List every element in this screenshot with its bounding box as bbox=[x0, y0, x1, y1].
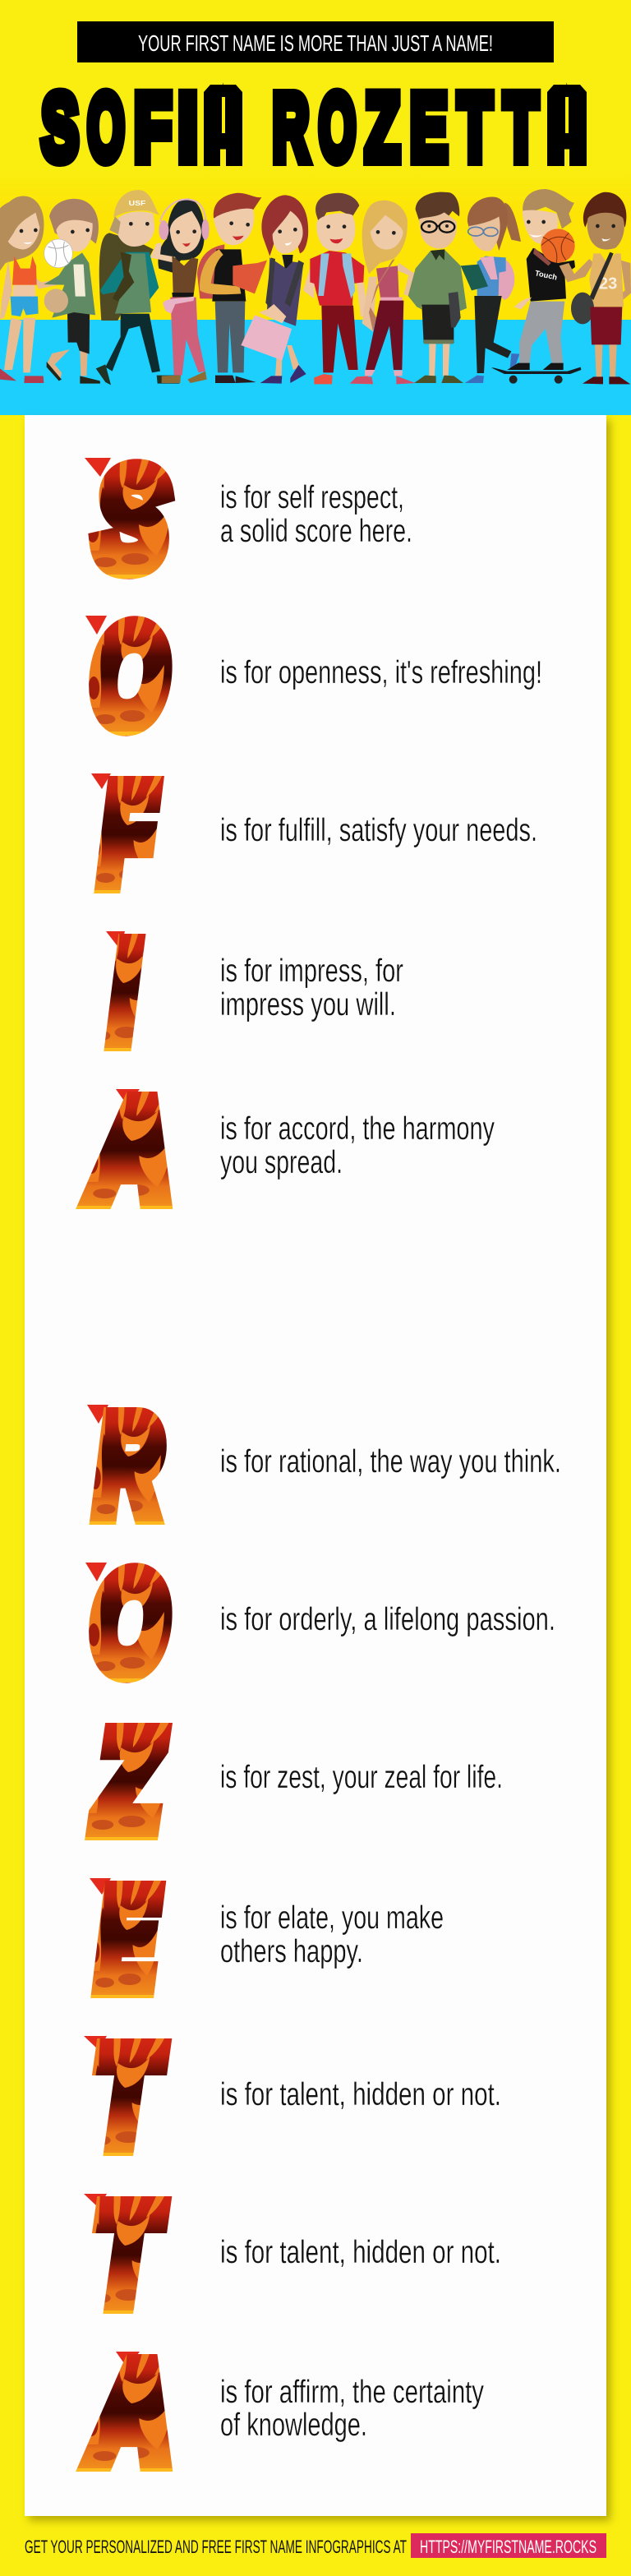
illustration: group of young people, right half bbox=[303, 189, 631, 384]
row: letter E: E bbox=[97, 1862, 159, 2018]
person 12: boy in tank top with shoulder bag bbox=[560, 192, 631, 384]
row: letter T: T bbox=[94, 2020, 163, 2176]
title: name: A bbox=[550, 75, 583, 181]
row: letter R: R bbox=[96, 1389, 160, 1544]
row: letter A bbox=[90, 1073, 495, 1229]
row: letter A: is for affirm, the certainty bbox=[220, 2375, 484, 2410]
title: name: O bbox=[88, 76, 124, 181]
title: name: S bbox=[41, 75, 79, 180]
row: letter S: is for self respect, bbox=[220, 480, 404, 515]
row: letter A: A bbox=[90, 2335, 171, 2491]
row: letter A: is for accord, the harmony bbox=[220, 1111, 495, 1147]
title: name: O bbox=[319, 76, 356, 181]
row: letter T: is for talent, hidden or not. bbox=[220, 2235, 501, 2270]
row: letter S: a solid score here. bbox=[220, 514, 412, 549]
title: name: F bbox=[134, 75, 172, 180]
row: letter E bbox=[90, 1862, 444, 2018]
row: letter T: is for talent, hidden or not. bbox=[220, 2077, 501, 2112]
footer call to action: GET YOUR PERSONALIZED AND FREE FIRST NAME INFOGRAPHICS AT bbox=[25, 2537, 407, 2557]
person 4: girl with pink headphones bbox=[150, 199, 210, 376]
person 12: boy in tank top with shoulder bag: 23 bbox=[599, 275, 617, 293]
person 11: skateboarder with basketball: Touch bbox=[534, 269, 558, 282]
illustration backdrop: yellow band bbox=[0, 169, 631, 320]
row: letter O: O bbox=[91, 1544, 167, 1701]
illustration backdrop: blue floor bbox=[0, 320, 631, 415]
person 2: volleyball player in green jacket bbox=[44, 199, 100, 384]
row: letter O bbox=[85, 1544, 555, 1701]
row: letter Z bbox=[94, 1704, 503, 1859]
row: letter T: T bbox=[94, 2177, 163, 2334]
row: letter A: you spread. bbox=[220, 1145, 343, 1180]
person 1: girl in orange top bbox=[0, 196, 64, 383]
title: name: A bbox=[207, 75, 239, 181]
title: name: R bbox=[273, 75, 309, 180]
person 8: blonde girl in pink top bbox=[350, 201, 416, 384]
row: letter R bbox=[87, 1389, 561, 1544]
person 11: skateboarder with basketball bbox=[491, 189, 581, 384]
row: letter E: is for elate, you make bbox=[220, 1900, 444, 1936]
row: letter T bbox=[84, 2177, 501, 2334]
row: letter I: impress you will. bbox=[220, 987, 396, 1023]
row: letter S bbox=[85, 441, 412, 597]
person 3: hiker with cap and backpack bbox=[96, 190, 207, 385]
row: letter Z: is for zest, your zeal for life. bbox=[220, 1760, 503, 1795]
person 7: boy in red tee with blue straps bbox=[303, 193, 373, 384]
row: letter A bbox=[90, 2335, 484, 2491]
person 5: boy with book and backpack bbox=[197, 193, 267, 383]
row: letter E: others happy. bbox=[220, 1934, 363, 1969]
person 10: girl with ponytail and tablet bbox=[461, 196, 521, 383]
title: name: T bbox=[458, 75, 492, 180]
person 3: hiker with cap and backpack: USF bbox=[129, 199, 145, 207]
row: letter T bbox=[84, 2020, 501, 2176]
row: letter A: of knowledge. bbox=[220, 2407, 367, 2443]
row: letter F: F bbox=[100, 757, 156, 913]
row: letter I: I bbox=[111, 915, 138, 1071]
title: name: T bbox=[504, 75, 538, 180]
row: letter F bbox=[91, 757, 537, 913]
row: letter I: is for impress, for bbox=[220, 953, 403, 989]
illustration: group of young people, left half bbox=[0, 190, 308, 385]
row: letter Z: Z bbox=[94, 1704, 164, 1859]
row: letter O bbox=[85, 598, 542, 754]
person 9: boy with black glasses and green sweater bbox=[408, 192, 467, 383]
person 6: girl with red hair and pink bag bbox=[241, 195, 308, 384]
header banner bbox=[77, 21, 554, 62]
row: letter O: O bbox=[91, 598, 167, 754]
row: letter S: S bbox=[96, 441, 167, 597]
title: name: I bbox=[178, 75, 197, 181]
panel: letters and meanings bbox=[25, 415, 606, 2516]
title: name: E bbox=[410, 75, 448, 181]
row: letter I bbox=[106, 915, 403, 1071]
title: name: Z bbox=[365, 75, 400, 181]
row: letter A: A bbox=[90, 1073, 171, 1229]
title: name bbox=[41, 75, 587, 181]
